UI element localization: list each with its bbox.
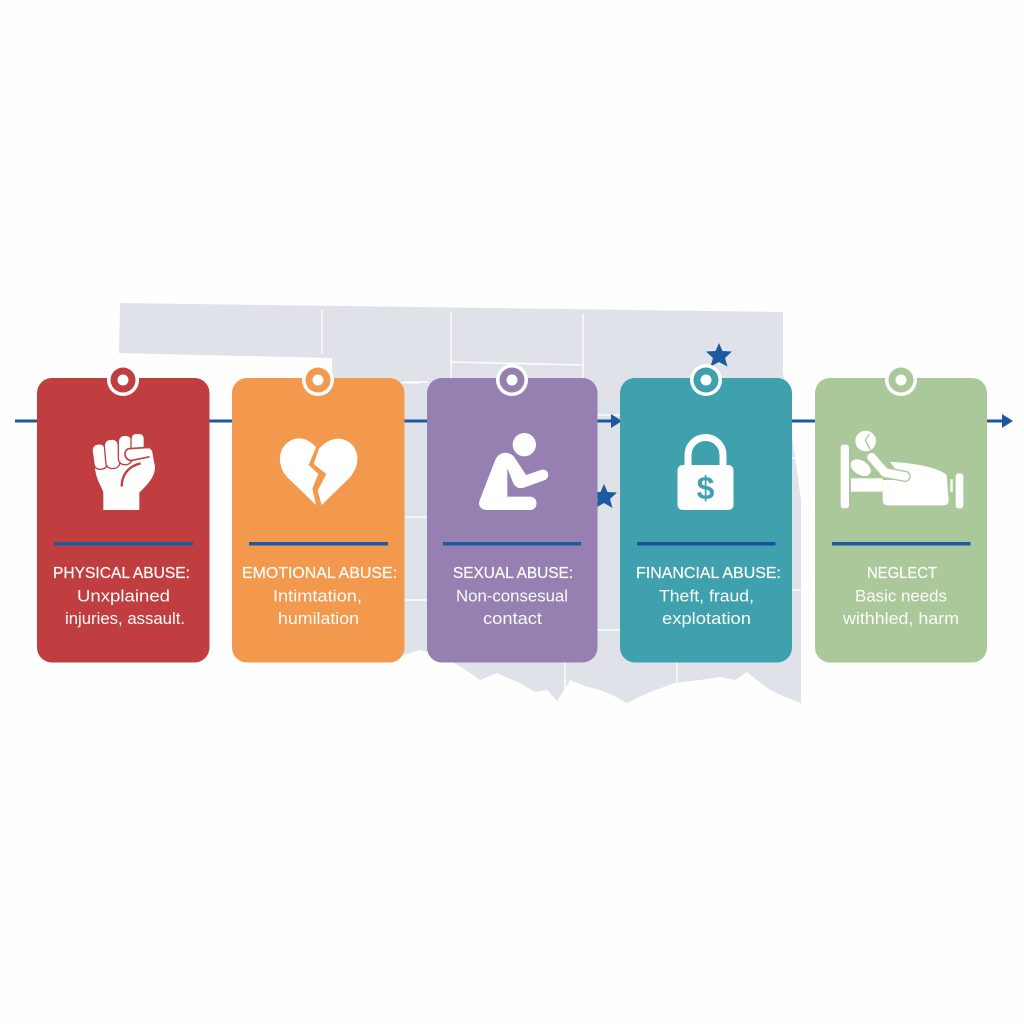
text: neglect xyxy=(842,565,959,628)
pin: neglect xyxy=(885,364,917,396)
text: sexual abuse: contact xyxy=(483,610,542,628)
text: sexual abuse xyxy=(453,565,573,628)
text: physical abuse: Unxplained xyxy=(77,588,170,606)
panel: sexual abuse xyxy=(427,364,598,662)
text: neglect: withhled, harm xyxy=(842,610,959,628)
star: upper map marker xyxy=(706,343,732,366)
divider xyxy=(832,542,970,546)
divider xyxy=(443,542,581,546)
timeline arrow xyxy=(15,414,1013,428)
icon: broken heart xyxy=(280,438,357,505)
text: emotional abuse xyxy=(242,565,397,628)
divider xyxy=(54,542,193,546)
pin: physical abuse xyxy=(107,364,139,396)
icon: person in bed xyxy=(841,431,963,508)
text: sexual abuse: Non-consesual xyxy=(456,588,568,606)
icon: crouching person xyxy=(479,433,548,510)
text: physical abuse xyxy=(53,565,190,628)
panel: physical abuse xyxy=(37,364,210,662)
divider xyxy=(249,542,388,546)
text: financial abuse: explotation xyxy=(662,610,751,628)
icon: padlock with dollar sign: $ xyxy=(697,470,715,506)
pin: sexual abuse xyxy=(496,364,528,396)
text: emotional abuse: EMOTIONAL ABUSE: xyxy=(242,565,397,582)
text: neglect: NEGLECT xyxy=(867,565,937,582)
text: neglect: Basic needs xyxy=(855,588,947,606)
star: lower map marker xyxy=(591,484,617,508)
text: physical abuse: injuries, assault. xyxy=(65,610,185,628)
panel: financial abuse xyxy=(620,364,792,662)
text: financial abuse: FINANCIAL ABUSE: xyxy=(636,565,781,582)
icon: raised fist xyxy=(91,433,155,510)
divider xyxy=(637,542,776,546)
text: financial abuse: Theft, fraud, xyxy=(659,588,754,606)
text: physical abuse: PHYSICAL ABUSE: xyxy=(53,565,190,582)
text: emotional abuse: Intimtation, xyxy=(273,588,362,606)
background map xyxy=(119,303,801,703)
panel: neglect xyxy=(815,364,987,662)
text: financial abuse xyxy=(636,565,781,628)
pin: emotional abuse xyxy=(302,364,334,396)
icon: padlock with dollar sign xyxy=(678,438,734,510)
pin: financial abuse xyxy=(690,364,722,396)
panel: emotional abuse xyxy=(232,364,404,662)
text: emotional abuse: humilation xyxy=(278,610,359,628)
text: sexual abuse: SEXUAL ABUSE: xyxy=(453,565,573,582)
